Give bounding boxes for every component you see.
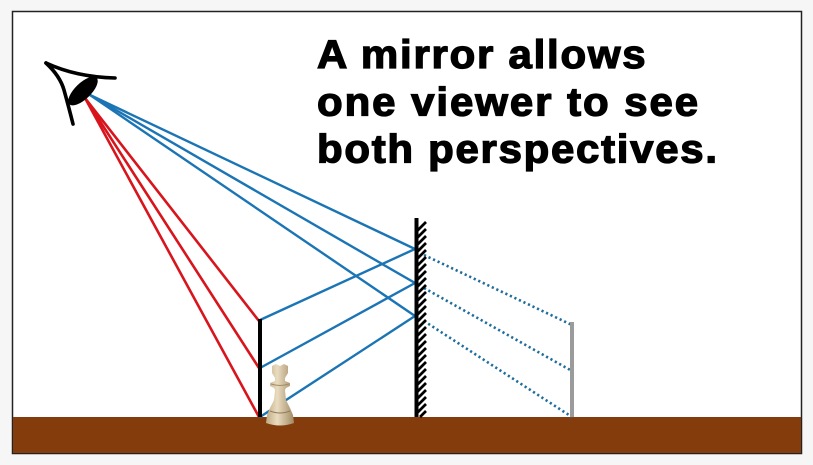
title: A mirror allows [317,32,646,77]
title: one viewer to see [317,79,698,124]
icon: chess queen piece [266,364,294,426]
mirror [414,218,418,417]
mirror hatching [417,222,426,417]
red rays from eye to direct object [85,98,259,417]
title: both perspectives. [317,126,717,171]
virtual image of object [570,322,574,417]
blue rays from eye to mirror and back to object [90,95,415,417]
dotted virtual rays behind mirror [424,255,572,417]
object: direct view bar [258,319,262,417]
ground [13,417,801,453]
title [317,32,717,171]
icon: eye [46,63,115,124]
